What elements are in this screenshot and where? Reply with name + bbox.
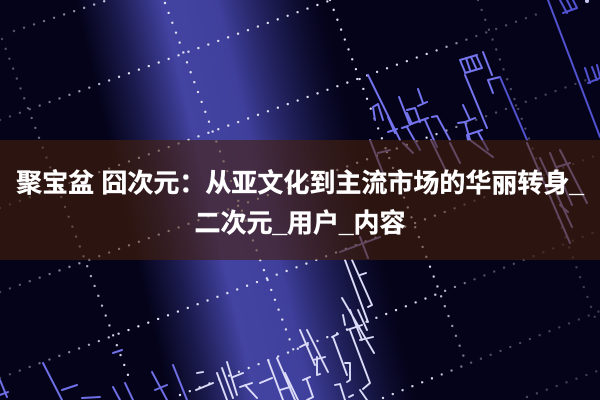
banner: translucent brown strip xyxy=(0,140,600,260)
circuit traces: centre top xyxy=(368,52,500,150)
title xyxy=(16,168,584,238)
title: 聚宝盆 囧次元：从亚文化到主流市场的华丽转身_ xyxy=(16,168,584,198)
title: 二次元_用户_内容 xyxy=(195,208,405,238)
circuit traces: upper right xyxy=(500,0,600,140)
circuit traces: lower left xyxy=(0,350,187,400)
circuit traces: lower centre, bright on blue xyxy=(196,260,374,400)
circuit traces: behind banner xyxy=(340,140,587,258)
